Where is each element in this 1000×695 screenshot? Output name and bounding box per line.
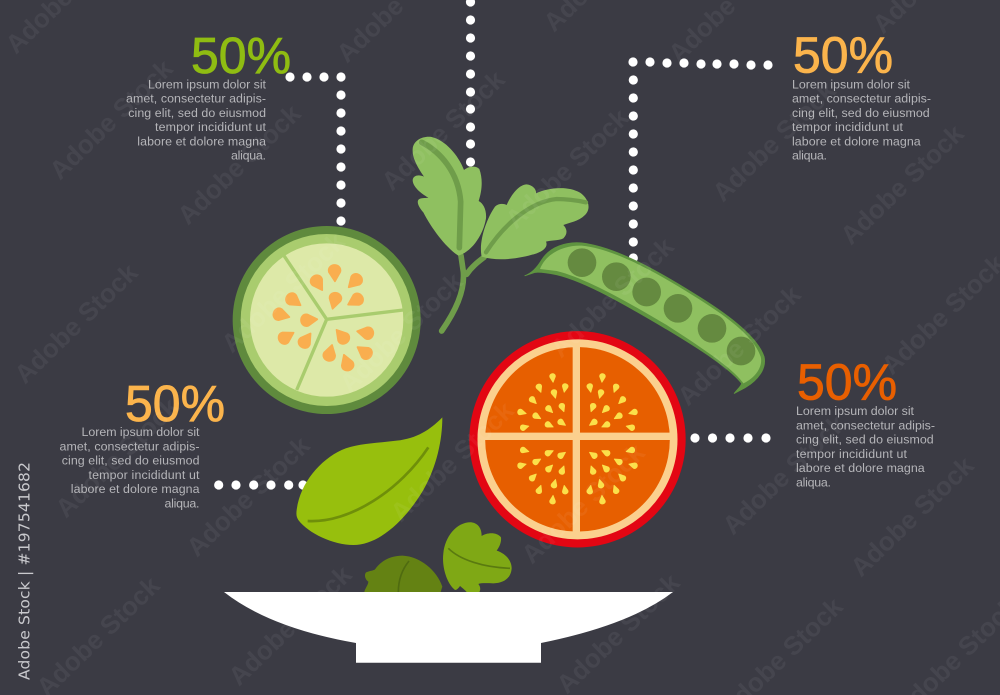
text block: top right <box>792 78 931 162</box>
callout: left <box>60 375 225 510</box>
watermarks: Adobe Stock <box>499 102 635 234</box>
icon: tomato slice <box>469 331 686 547</box>
watermarks: Adobe Stock <box>8 257 144 389</box>
watermarks: Adobe Stock <box>716 408 852 540</box>
text block: right: Lorem ipsum dolor sit <box>796 404 915 418</box>
watermarks: Adobe Stock <box>171 98 307 230</box>
dotted connector: top centre <box>466 0 475 167</box>
text block: top right: Lorem ipsum dolor sit <box>792 78 911 92</box>
text block: left: amet, consectetur adipis- <box>60 439 200 453</box>
icon: pea pod <box>525 243 764 393</box>
watermarks: Adobe Stock <box>43 53 179 185</box>
callout: top left <box>126 27 291 162</box>
watermarks: Adobe Stock <box>544 231 680 363</box>
text block: top right: tempor incididunt ut <box>792 120 904 134</box>
text block: top left: labore et dolore magna <box>137 134 266 148</box>
text block: left: aliqua. <box>164 496 200 510</box>
watermarks: Adobe Stock <box>834 118 970 250</box>
text block: left: labore et dolore magna <box>71 482 200 496</box>
text block: right: cing elit, sed do eiusmod <box>796 433 934 447</box>
watermarks: Adobe Stock <box>180 430 316 562</box>
text block: left: Lorem ipsum dolor sit <box>82 425 200 439</box>
icon: small dark leaf <box>364 556 442 592</box>
text block: top right: amet, consectetur adipis- <box>792 92 931 106</box>
watermarks: Adobe Stock <box>706 75 842 207</box>
percentage: left: 50% <box>125 375 225 432</box>
percentage: top left: 50% <box>191 27 291 84</box>
text block: top left: tempor incididunt ut <box>155 120 267 134</box>
text block: top right: labore et dolore magna <box>792 134 921 148</box>
dotted connector: left <box>214 480 308 490</box>
watermarks: Adobe Stock <box>215 226 351 358</box>
icon: parsley sprig <box>413 137 589 331</box>
percentage: right: 50% <box>797 354 897 410</box>
icon: small lobed leaf <box>443 522 512 592</box>
stock id label: Adobe Stock | #197541682 <box>16 462 34 680</box>
watermarks: Adobe Stock <box>49 391 185 523</box>
icon: cucumber slice <box>233 226 421 414</box>
watermarks: Adobe Stock <box>515 437 651 569</box>
text block: right <box>796 404 935 489</box>
text block: right: tempor incididunt ut <box>796 447 908 461</box>
text block: top right: cing elit, sed do eiusmod <box>792 106 930 120</box>
text block: top left <box>126 78 267 162</box>
icon: basil leaf <box>296 417 442 545</box>
text block: right: aliqua. <box>796 475 831 489</box>
text block: top right: aliqua. <box>792 148 827 162</box>
dotted connector: top right <box>628 57 773 263</box>
text block: left <box>60 425 200 510</box>
text block: top left: Lorem ipsum dolor sit <box>148 78 267 92</box>
callout: right <box>796 354 935 489</box>
icon: white bowl <box>224 592 673 663</box>
dotted connector: right <box>690 433 771 443</box>
text block: left: tempor incididunt ut <box>88 468 200 482</box>
text block: top left: amet, consectetur adipis- <box>126 92 266 106</box>
watermarks: Adobe Stock <box>844 450 980 582</box>
text block: top left: cing elit, sed do eiusmod <box>128 106 266 120</box>
watermarks: Adobe Stock <box>333 266 469 398</box>
watermarks: Adobe Stock <box>375 64 511 196</box>
text block: right: labore et dolore magna <box>796 461 925 475</box>
text block: right: amet, consectetur adipis- <box>796 418 935 432</box>
watermarks: Adobe Stock <box>671 279 807 411</box>
percentage: top right: 50% <box>793 26 893 84</box>
dotted connector: top left <box>285 72 346 226</box>
callout: top right <box>792 26 931 162</box>
text block: left: cing elit, sed do eiusmod <box>62 454 200 468</box>
watermarks: Adobe Stock <box>384 395 520 527</box>
watermarks: Adobe Stock <box>222 559 358 691</box>
text block: top left: aliqua. <box>231 148 266 162</box>
